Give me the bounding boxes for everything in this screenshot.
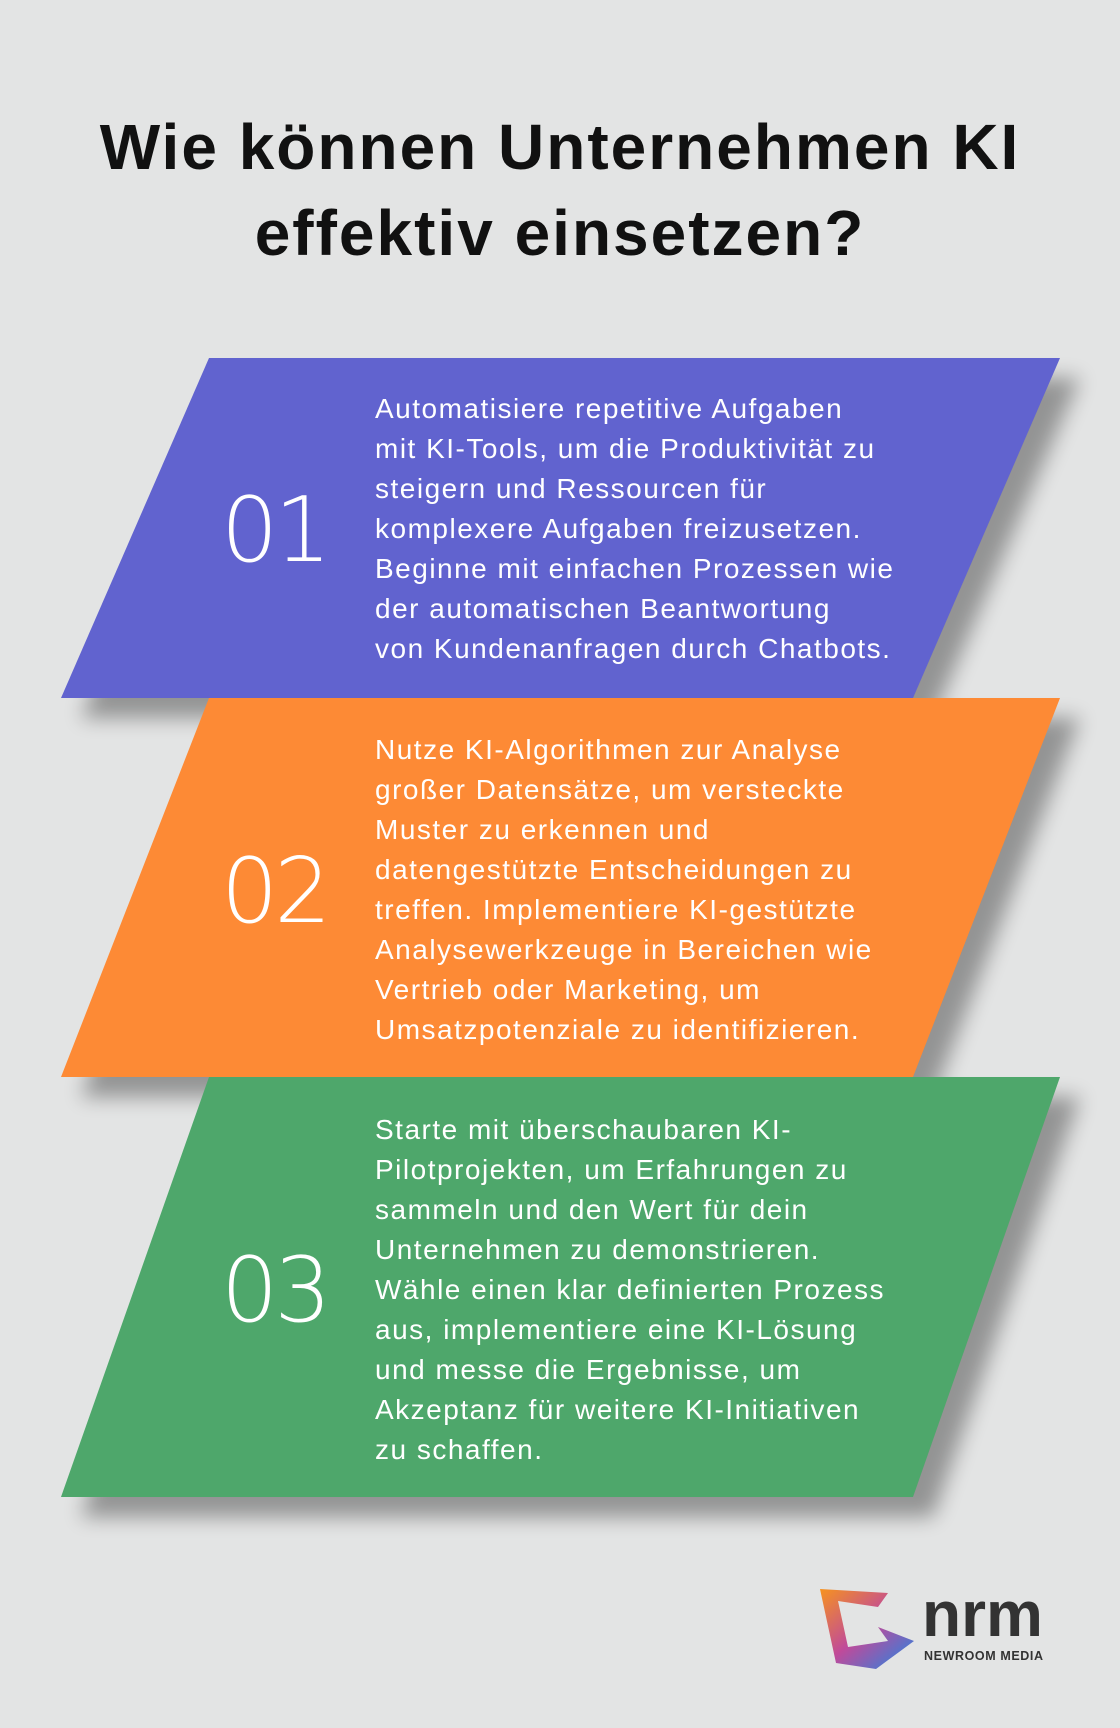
text 02: Nutze KI-Algorithmen zur Analyse: [375, 734, 842, 765]
icon: logo mark: [820, 1589, 914, 1669]
panel: 01 purple: [61, 358, 1060, 698]
text 01: [375, 393, 894, 664]
logo text: nrm: [922, 1578, 1043, 1650]
text 03: Starte mit überschaubaren KI-: [375, 1114, 792, 1145]
text 01: mit KI-Tools, um die Produktivität zu: [375, 433, 876, 464]
text 03: aus, implementiere eine KI-Lösung: [375, 1314, 857, 1345]
text 02: datengestützte Entscheidungen zu: [375, 854, 853, 885]
text 02: [375, 734, 873, 1045]
text 03: [375, 1114, 885, 1465]
text 01: von Kundenanfragen durch Chatbots.: [375, 633, 891, 664]
logo: [820, 1578, 1044, 1669]
logo: NEWROOM MEDIA: [924, 1649, 1044, 1663]
text 03: Akzeptanz für weitere KI-Initiativen: [375, 1394, 860, 1425]
text 03: und messe die Ergebnisse, um: [375, 1354, 801, 1385]
text 01: komplexere Aufgaben freizusetzen.: [375, 513, 862, 544]
title: Wie können Unternehmen KI: [100, 111, 1020, 183]
number 01: 01: [221, 478, 328, 583]
text 03: Unternehmen zu demonstrieren.: [375, 1234, 820, 1265]
text 03: sammeln und den Wert für dein: [375, 1194, 809, 1225]
text 03: zu schaffen.: [375, 1434, 543, 1465]
title: [100, 111, 1020, 269]
panel: 02 orange: [61, 698, 1060, 1077]
title: effektiv einsetzen?: [255, 197, 865, 269]
text 02: Umsatzpotenziale zu identifizieren.: [375, 1014, 860, 1045]
text 03: Wähle einen klar definierten Prozess: [375, 1274, 885, 1305]
text 02: treffen. Implementiere KI-gestützte: [375, 894, 857, 925]
panel: 03 green: [61, 1077, 1060, 1497]
text 02: großer Datensätze, um versteckte: [375, 774, 845, 805]
text 02: Vertrieb oder Marketing, um: [375, 974, 761, 1005]
text 01: der automatischen Beantwortung: [375, 593, 831, 624]
text 01: Beginne mit einfachen Prozessen wie: [375, 553, 894, 584]
number 03: 03: [221, 1238, 328, 1343]
text 02: Analysewerkzeuge in Bereichen wie: [375, 934, 873, 965]
text 03: Pilotprojekten, um Erfahrungen zu: [375, 1154, 848, 1185]
text 02: Muster zu erkennen und: [375, 814, 710, 845]
number 02: 02: [221, 839, 328, 944]
text 01: Automatisiere repetitive Aufgaben: [375, 393, 843, 424]
text 01: steigern und Ressourcen für: [375, 473, 767, 504]
